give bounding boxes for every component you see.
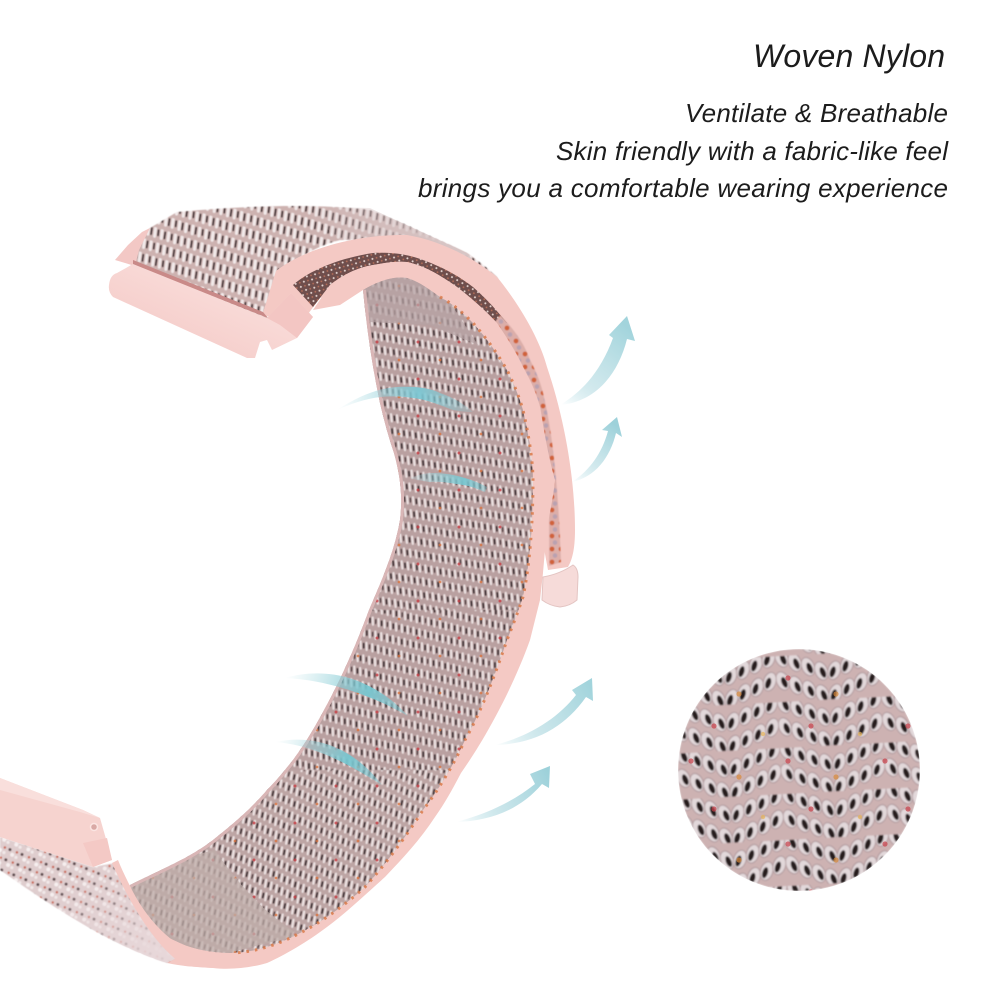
connector front bar [109, 264, 313, 358]
pale fade toward lower edge [0, 837, 187, 963]
text block: features: brings you a comfortable wearing experience [418, 173, 948, 203]
swoosh 1 [337, 387, 473, 412]
connector end cap shading [267, 293, 313, 338]
swoosh 2 [410, 473, 487, 492]
text block: features [418, 98, 949, 203]
connector upper facet [0, 778, 100, 818]
band: lower binding edge [112, 860, 213, 968]
connector back lip [115, 228, 150, 266]
swoosh 3 [285, 673, 408, 716]
connector: top [109, 228, 313, 358]
connector seat shadow [133, 260, 268, 318]
arrow 3 [495, 678, 593, 745]
pin tip [542, 565, 578, 607]
band: colored outer strip [495, 315, 561, 566]
arrow 1 [560, 316, 635, 405]
watch band illustration [0, 206, 578, 970]
connector side face [83, 838, 112, 867]
arrow 2 [572, 417, 622, 482]
swoosh 4 [275, 740, 382, 785]
text block: features: Skin friendly with a fabric-like feel [556, 136, 949, 166]
pale haze on far side of strap [300, 206, 515, 310]
grey haze at top of inner surface [363, 278, 478, 345]
circular fabric close-up [678, 649, 920, 891]
connector pin hole [90, 824, 98, 830]
band: orange dotted stitch edge [233, 297, 533, 953]
text block: features: Ventilate & Breathable [685, 98, 948, 128]
soft haze at bottom of inner surface [130, 852, 298, 953]
band: top outer woven surface [131, 206, 515, 322]
pale left margin of inner surface [130, 290, 401, 885]
heading: Woven Nylon: Woven Nylon [753, 38, 945, 74]
airflow: swooshes through band [275, 387, 487, 785]
band: inner woven surface [120, 270, 550, 970]
band: dark interior gap [293, 253, 507, 323]
band: inner binding and lower curve [127, 262, 555, 969]
colored thread flecks [688, 675, 911, 890]
arrow 4 [456, 766, 550, 822]
connector: bottom [0, 778, 112, 867]
band: outer pink binding [262, 235, 575, 570]
band: lower outer woven piece [0, 837, 187, 963]
